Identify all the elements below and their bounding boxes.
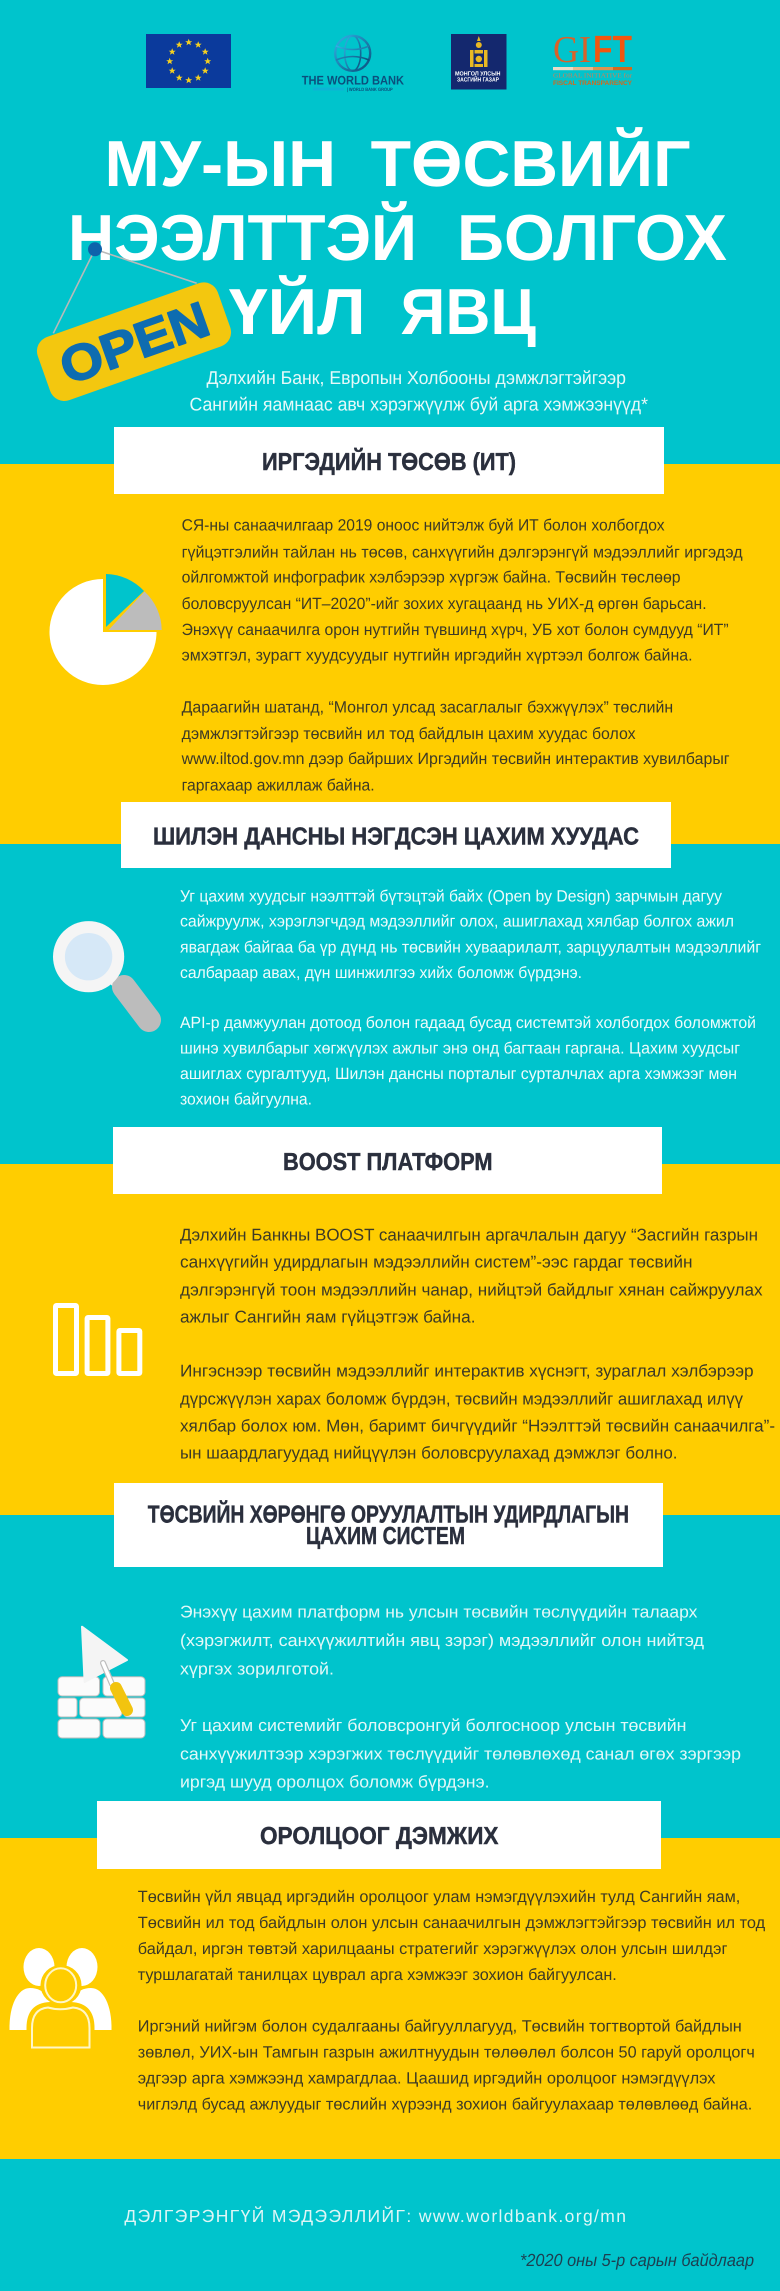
text block: investment management system: Энэхүү цахим платформ нь улсын төсвийн төслүүдийн талаарх <box>180 1603 698 1622</box>
icon: hanging OPEN sign <box>33 242 235 405</box>
text block: citizens budget: Дараагийн шатанд, “Монгол улсад засаглалыг бэхжүүлэх” төслийн <box>182 698 673 716</box>
text block: supporting participation: зөвлөл, УИХ-ын Тамгын газрын ажилтнуудын төлөөлөл болсон 50 гаруй оролцогч <box>138 2044 755 2062</box>
text block: single account portal <box>180 887 761 1108</box>
text block: single account portal: салбараар авах, дүн шинжилгээ хийх боломж бүрдэнэ. <box>180 964 582 982</box>
text block: supporting participation: Төсвийн ил тод байдлын олон улсын санаачилгын дэмжлэгтэйгээр төсвийн ил тод <box>138 1914 766 1932</box>
panel heading: single account portal <box>121 802 671 868</box>
text block: supporting participation: чиглэлд бусад ажлуудыг төслийн хүрээнд зохион байгуулахаар төлөвлөөд байна. <box>138 2096 752 2114</box>
icon: magnifying glass <box>53 921 149 1020</box>
logo: GIFT: GLOBAL INITIATIVE for <box>553 72 633 80</box>
title: ТӨСВИЙГ <box>371 127 691 200</box>
icon: trowel and bricks <box>58 1627 145 1738</box>
text block: citizens budget: гаргахаар ажиллаж байна. <box>182 777 375 795</box>
logo: The World Bank <box>302 36 404 93</box>
text block: investment management system: санхүүжилтээр хэрэгжих төслүүдийг төлөвлөхөд санал өгөх зэргээр <box>180 1744 741 1763</box>
text block: investment management system <box>180 1603 741 1792</box>
text block: BOOST platform: дүрсжүүлэн харах боломж бүрдэн, төсвийн мэдээллийг ашиглахад илүү <box>180 1389 743 1408</box>
logo: Government of Mongolia <box>451 34 506 90</box>
panel heading: citizens budget <box>114 427 664 494</box>
footer: more information link: ДЭЛГЭРЭНГҮЙ МЭДЭЭЛЛИЙГ: www.worldbank.org/mn <box>124 2206 626 2226</box>
logo: Government of Mongolia: ЗАСГИЙН ГАЗАР <box>457 76 499 84</box>
text block: investment management system: Уг цахим системийг боловсронгуй болгосноор улсын төсвийн <box>180 1716 686 1735</box>
text block: BOOST platform: санхүүгийн удирдлагын мэдээллийн систем”-ээс гардаг төсвийн <box>180 1253 692 1272</box>
panel heading: BOOST platform <box>113 1127 662 1194</box>
text block: single account portal: Уг цахим хуудсыг нээлттэй бүтэцтэй байх (Open by Design) зарчмын дагуу <box>180 887 723 905</box>
text block: BOOST platform: ын шаардлагуудад нийцүүлэн боловсруулахад дэмжлэг болно. <box>180 1444 678 1463</box>
icon: pie chart <box>49 574 162 685</box>
text block: supporting participation: туршлагатай танилцах цуврал арга хэмжээг зохион байгуулсан. <box>138 1966 617 1984</box>
text block: supporting participation: Иргэний нийгэм болон судалгааны байгууллагууд, Төсвийн тогтвортой байдлын <box>138 2018 742 2036</box>
panel heading: BOOST platform: BOOST ПЛАТФОРМ <box>283 1149 492 1176</box>
text block: single account portal: шинэ хувилбарыг хөгжүүлэх ажлыг энэ онд багтаан гаргана. Цахим хуудсыг <box>180 1039 740 1057</box>
panel heading: single account portal: ШИЛЭН ДАНСНЫ НЭГДСЭН ЦАХИМ ХУУДАС <box>153 823 639 850</box>
panel heading: investment management system <box>114 1483 663 1567</box>
band: yellow citizens budget section <box>0 464 780 844</box>
band: yellow participation section <box>0 1838 780 2159</box>
text block: single account portal: сайжруулж, хэрэглэгчдэд мэдээллийг олох, ашиглахад хялбар болгох ажил <box>180 913 734 931</box>
icon: bar chart <box>56 1306 140 1374</box>
text block: citizens budget: эмхэтгэл, зурагт хуудсуудыг нутгийн иргэдийн хүртээл болгож байна. <box>182 647 693 665</box>
logo: Government of Mongolia: МОНГОЛ УЛСЫН <box>455 70 500 77</box>
subtitle: Сангийн яамнаас авч хэрэгжүүлж буй арга хэмжээнүүд* <box>190 394 648 415</box>
text block: supporting participation: Төсвийн үйл явцад иргэдийн оролцоог улам нэмэгдүүлэхийн тулд Сангийн яам, <box>138 1888 740 1906</box>
title: ҮЙЛ <box>229 275 366 348</box>
text block: BOOST platform: хялбар болох юм. Мөн, баримт бичгүүдийг “Нээлттэй төсвийн санаачилга”- <box>180 1417 775 1436</box>
text block: citizens budget: дэмжлэгтэйгээр төсвийн ил тод байдлын цахим хуудас болох <box>182 725 636 743</box>
icon: group of people <box>9 1948 112 2052</box>
logo: GIFT: FT <box>593 29 632 71</box>
text block: citizens budget: Энэхүү санаачилга орон нутгийн түвшинд хүрч, УБ хот болон сумдууд “ИТ” <box>182 621 729 639</box>
title: МУ-ЫН <box>104 127 336 200</box>
text block: single account portal: ашиглах сургалтууд, Шилэн дансны порталыг сурталчлах арга хэмжээг мөн <box>180 1065 737 1083</box>
logo: The World Bank: THE WORLD BANK <box>302 73 404 87</box>
text block: investment management system: иргэд шууд оролцох боломж бүрдэнэ. <box>180 1773 490 1792</box>
panel heading: supporting participation: ОРОЛЦООГ ДЭМЖИХ <box>260 1823 499 1850</box>
title: БОЛГОХ <box>457 201 727 274</box>
logo: GIFT: GI <box>553 29 591 71</box>
icon: hanging OPEN sign: OPEN <box>53 291 216 395</box>
text block: citizens budget: СЯ-ны санаачилгаар 2019 оноос нийтэлж буй ИТ болон холбогдох <box>182 517 665 535</box>
text block: BOOST platform: Дэлхийн Банкны BOOST санаачилгын аргачлалын дагуу “Засгийн газрын <box>180 1225 758 1244</box>
subtitle <box>190 367 648 415</box>
logo: The World Bank: | WORLD BANK GROUP <box>347 87 393 93</box>
title: ЯВЦ <box>400 275 536 348</box>
text block: investment management system: хүргэх зорилготой. <box>180 1659 334 1678</box>
text block: single account portal: зохион байгуулна. <box>180 1090 312 1108</box>
text block: citizens budget: гүйцэтгэлийн тайлан нь төсөв, санхүүгийн дэлгэрэнгүй мэдээллийг иргэдэд <box>182 543 743 561</box>
title <box>68 127 727 348</box>
text block: supporting participation: эдгээр арга хэмжээнд хамрагдлаа. Цаашид иргэдийн оролцоог нэмэгдүүлэх <box>138 2070 715 2088</box>
text block: single account portal: явагдаж байгаа ба үр дүнд нь төсвийн хуваарилалт, зарцуулалтын мэдээллийг <box>180 938 761 956</box>
text block: supporting participation <box>138 1888 766 2114</box>
logo: GIFT: FISCAL TRANSPARENCY <box>553 80 633 87</box>
panel heading: investment management system: ТӨСВИЙН ХӨРӨНГӨ ОРУУЛАЛТЫН УДИРДЛАГЫН <box>148 1500 629 1529</box>
text block: BOOST platform: Ингэснээр төсвийн мэдээллийг интерактив хүснэгт, зураглал хэлбэрээр <box>180 1362 754 1381</box>
text block: BOOST platform: дэлгэрэнгүй тоон мэдээллийн чанар, нийцтэй байдлыг хянан сайжруулах <box>180 1280 763 1299</box>
subtitle: Дэлхийн Банк, Европын Холбооны дэмжлэгтэйгээр <box>206 367 626 388</box>
text block: BOOST platform <box>180 1225 775 1463</box>
title: НЭЭЛТТЭЙ <box>68 201 417 274</box>
text block: single account portal: API-р дамжуулан дотоод болон гадаад бусад системтэй холбогдох боломжтой <box>180 1014 756 1032</box>
text block: citizens budget: ойлгомжтой инфографик хэлбэрээр хүргэж байна. Төсвийн төслөөр <box>182 568 681 586</box>
text block: citizens budget: боловсруулсан “ИТ–2020”-ийг зохих хугацаанд нь УИХ-д өргөн барьсан. <box>182 595 707 613</box>
band: yellow BOOST section <box>0 1164 780 1515</box>
panel heading: citizens budget: ИРГЭДИЙН ТӨСӨВ (ИТ) <box>262 447 516 476</box>
panel heading: supporting participation <box>97 1801 661 1869</box>
footnote: data date: *2020 оны 5-р сарын байдлаар <box>520 2250 754 2270</box>
text block: supporting participation: байдал, иргэн төвтэй харилцааны стратегийг хэрэгжүүлэх олон улсын шилдэг <box>138 1940 727 1958</box>
logo: European Union flag <box>146 34 231 88</box>
text block: investment management system: (хэрэгжилт, санхүүжилтийн явц зэрэг) мэдээллийг олон нийтэд <box>180 1631 704 1650</box>
text block: BOOST platform: ажлыг Сангийн яам гүйцэтгэж байна. <box>180 1308 476 1327</box>
text block: citizens budget <box>181 517 743 795</box>
panel heading: investment management system: ЦАХИМ СИСТЕМ <box>306 1523 465 1550</box>
text block: citizens budget: www.iltod.gov.mn дээр байрших Иргэдийн төсвийн интерактив хувилбарыг <box>181 750 730 768</box>
logo: GIFT <box>553 29 633 87</box>
